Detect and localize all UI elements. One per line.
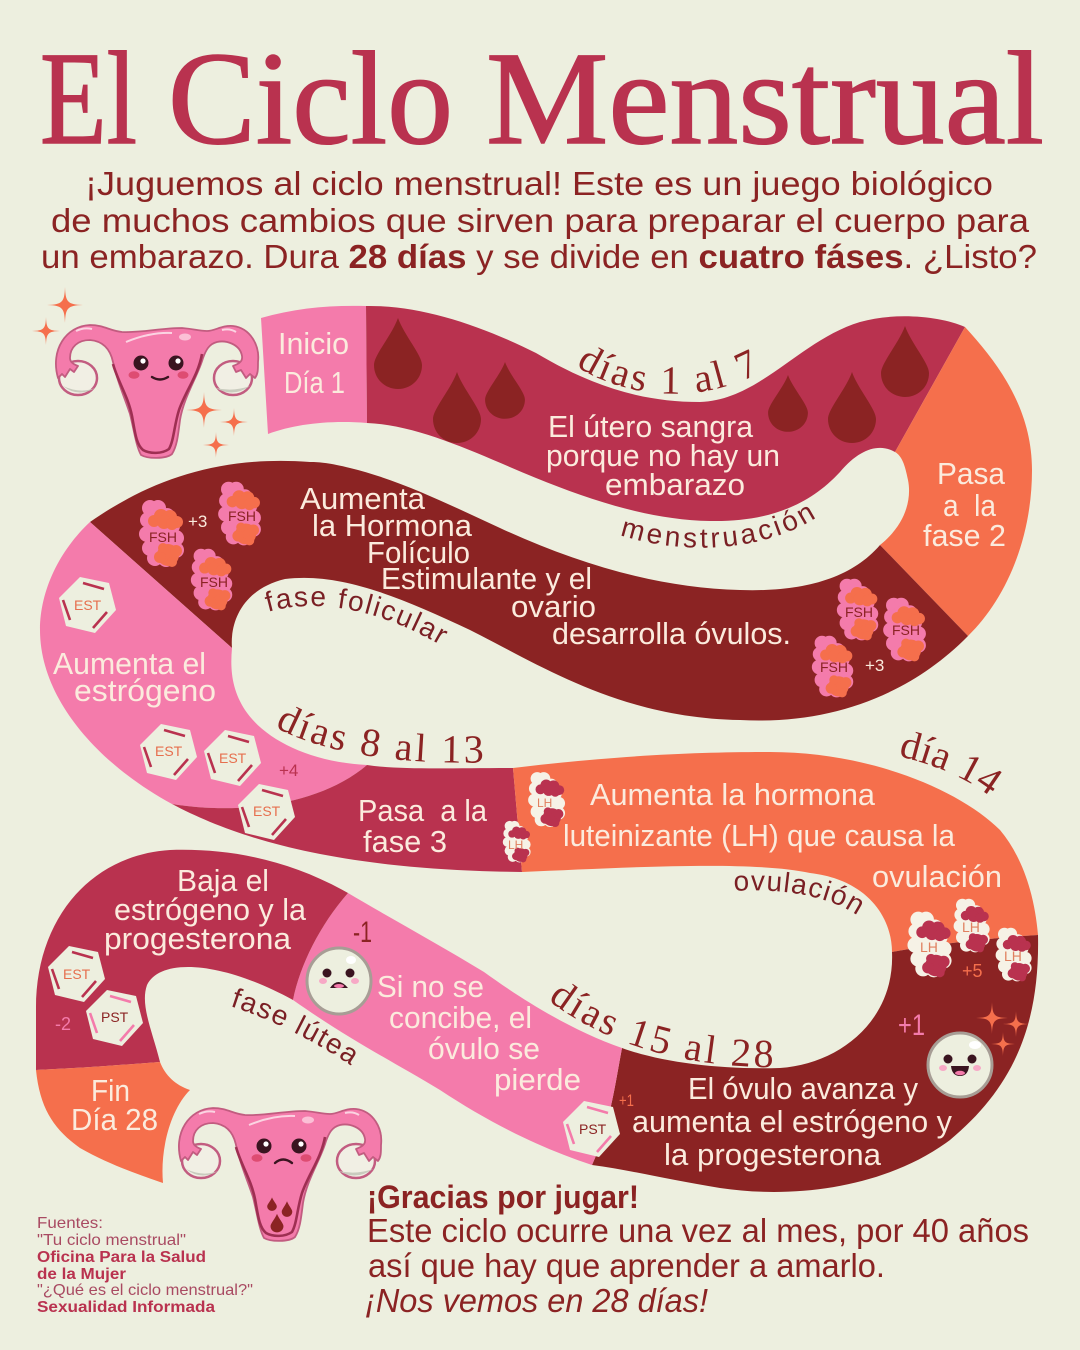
icon: FSH hormones right: +3 — [865, 656, 884, 675]
text: closing message: así que hay que aprender a amarlo. — [368, 1247, 885, 1284]
icon: FSH hormones right — [812, 579, 926, 697]
icon: FSH hormones left — [139, 482, 261, 610]
icon: FSH hormones left: FSH — [200, 574, 228, 590]
icon: estrogen hexagon — [238, 784, 295, 840]
text: aumenta la hormona: ovario — [511, 589, 596, 624]
panel: óvulo avanza días 15 al 28 — [592, 935, 1038, 1192]
panel: menstruación días 1 al 7 — [366, 306, 965, 521]
text: aumenta la hormona luteinizante: Aumenta la hormona — [590, 777, 876, 812]
text: closing message: ¡Nos vemos en 28 días! — [365, 1282, 708, 1319]
icon: sad uterus — [179, 1108, 381, 1241]
title: El — [40, 24, 137, 172]
text: minus one: -1 — [353, 916, 372, 949]
text: small plus one: +1 — [619, 1091, 634, 1110]
label: días 15 al 28: días 15 al 28 — [552, 984, 772, 1068]
icon: blood drops — [374, 318, 929, 443]
text: si no se concibe: Si no se — [377, 969, 484, 1004]
text: aumenta la hormona luteinizante: ovulación — [872, 859, 1002, 894]
icon: FSH hormones right: FSH — [892, 622, 920, 638]
panel: ovulación día 14 — [513, 752, 1038, 952]
panel: si no se concibe — [293, 893, 634, 1165]
text: aumenta la hormona luteinizante — [563, 777, 1002, 894]
text: si no se concibe: pierde — [494, 1062, 581, 1097]
text: aumenta la hormona luteinizante: luteinizante (LH) que causa la — [563, 818, 956, 853]
panel: pasa a la fase 3: fase 3 — [363, 824, 447, 859]
text: sources: Oficina Para la Salud — [37, 1249, 206, 1266]
text: aumenta la hormona: Estimulante y el — [381, 561, 592, 596]
icon: LH hormones: LH — [537, 796, 552, 810]
icon: LH hormones: LH — [920, 939, 938, 955]
panel: inicio día 1: Día 1 — [284, 365, 345, 400]
panel: pasa a la fase 2: Pasa — [937, 456, 1006, 491]
icon: LH hormones: LH — [508, 838, 523, 852]
icon: FSH hormones left: FSH — [149, 529, 177, 545]
panel: baja el estrógeno — [36, 850, 348, 1070]
icon: estrogen hexagons: EST — [155, 743, 183, 759]
text: el útero sangra: porque no hay un — [546, 438, 780, 473]
icon: estrogen hexagon: EST — [253, 803, 281, 819]
icon: LH hormones — [503, 772, 1032, 981]
title: Menstrual — [486, 24, 1044, 172]
text: sources: "¿Qué es el ciclo menstrual?" — [37, 1282, 253, 1299]
text: plus five: +5 — [962, 961, 983, 981]
text: aumenta la hormona — [300, 481, 791, 651]
text: si no se concibe — [377, 969, 581, 1097]
icon: FSH hormones left: +3 — [188, 512, 207, 531]
icon: happy ovum — [928, 1033, 992, 1097]
label: día 14: día 14 — [901, 732, 1002, 794]
panel: pasa a la fase 3 — [172, 765, 522, 872]
icon: sparkles around happy uterus — [32, 287, 248, 458]
text: baja el estrógeno — [104, 863, 307, 956]
icon: LH hormones: LH — [962, 919, 980, 935]
text: el óvulo avanza: aumenta el estrógeno y — [632, 1104, 952, 1139]
panel: pasa a la fase 2 — [880, 327, 1032, 636]
panel: fin día 28 — [36, 1062, 190, 1183]
panel: aumenta el estrógeno: Aumenta el — [53, 646, 206, 681]
icon: FSH hormones left: FSH — [228, 508, 256, 524]
icon: sad ovum — [307, 948, 371, 1014]
icon: estrogen hexagons: EST — [74, 597, 102, 613]
text: el útero sangra: El útero sangra — [548, 409, 754, 444]
text: el óvulo avanza: la progesterona — [664, 1137, 882, 1172]
panel: pasa a la fase 2: a la — [943, 488, 997, 523]
text: aumenta la hormona: Folículo — [367, 535, 470, 570]
panel: pasa a la fase 3: Pasa a la — [358, 793, 488, 828]
icon: estrogen hexagons: EST — [219, 750, 247, 766]
panel: pasa a la fase 2: fase 2 — [923, 518, 1006, 553]
label: fase lútea: fase lútea — [232, 988, 356, 1066]
text: closing message — [365, 1179, 1029, 1319]
icon: FSH hormones right: FSH — [820, 659, 848, 675]
icon: EST hexagon — [48, 946, 105, 1002]
text: el óvulo avanza: El óvulo avanza y — [688, 1071, 918, 1106]
title: Ciclo — [168, 24, 453, 172]
icon: estrogen hexagons — [59, 577, 298, 786]
icon: progesterone hexagon — [563, 1101, 620, 1157]
text: baja el estrógeno: progesterona — [104, 921, 292, 956]
text: plus one: +1 — [898, 1009, 925, 1042]
text: aumenta la hormona: Aumenta — [300, 481, 426, 516]
icon: FSH hormones right: FSH — [845, 604, 873, 620]
text: sources — [37, 1215, 253, 1316]
title — [40, 24, 1044, 172]
icon: LH hormones: LH — [1004, 948, 1022, 964]
panel: aumenta el estrógeno — [40, 522, 367, 808]
icon: PST hexagon: PST — [101, 1009, 129, 1025]
label: ovulación: ovulación — [734, 872, 862, 914]
panel: fin día 28: Fin — [91, 1073, 130, 1108]
label: días 8 al 13: días 8 al 13 — [278, 706, 482, 763]
icon: happy uterus — [56, 325, 258, 458]
text: minus two: -2 — [55, 1014, 71, 1034]
text: si no se concibe: concibe, el — [389, 1000, 532, 1035]
intro text — [41, 165, 1037, 275]
text: sources: Fuentes: — [37, 1215, 103, 1232]
text: baja el estrógeno: Baja el — [177, 863, 269, 898]
text: aumenta la hormona: la Hormona — [312, 508, 473, 543]
label: fase folicular: fase folicular — [264, 588, 448, 643]
intro text: de muchos cambios que sirven para preparar el cuerpo para — [51, 202, 1030, 239]
icon: PST hexagon — [86, 990, 143, 1046]
text: closing message: Este ciclo ocurre una vez al mes, por 40 años — [367, 1212, 1029, 1249]
icon: progesterone hexagon: PST — [579, 1121, 607, 1137]
icon: EST hexagon: EST — [63, 966, 91, 982]
label: menstruación: menstruación — [622, 506, 815, 548]
text: sources: Sexualidad Informada — [37, 1299, 215, 1316]
intro text: ¡Juguemos al ciclo menstrual! Este es un juego biológico — [85, 165, 993, 202]
text: el útero sangra — [546, 409, 780, 502]
icon: sparkles — [976, 1002, 1029, 1056]
text: baja el estrógeno: estrógeno y la — [114, 892, 307, 927]
panel: fase folicular FSH — [90, 461, 968, 721]
panel: aumenta el estrógeno: estrógeno — [74, 673, 216, 708]
text: sources: "Tu ciclo menstrual" — [37, 1232, 186, 1249]
text: el útero sangra: embarazo — [605, 467, 745, 502]
text: el óvulo avanza — [632, 1071, 952, 1172]
panel: fin día 28: Día 28 — [71, 1102, 158, 1137]
icon: estrogen hexagons: +4 — [279, 761, 298, 780]
label: días 1 al 7: días 1 al 7 — [580, 347, 750, 394]
text: closing message: ¡Gracias por jugar! — [367, 1179, 639, 1215]
text: si no se concibe: óvulo se — [428, 1031, 540, 1066]
text: aumenta la hormona: desarrolla óvulos. — [552, 616, 791, 651]
panel: inicio día 1: Inicio — [278, 326, 349, 361]
panel: inicio día 1 — [261, 306, 367, 434]
intro text: un embarazo. Dura 28 días y se divide en cuatro fáses . ¿Listo? — [41, 238, 1037, 275]
text: sources: de la Mujer — [37, 1266, 126, 1283]
